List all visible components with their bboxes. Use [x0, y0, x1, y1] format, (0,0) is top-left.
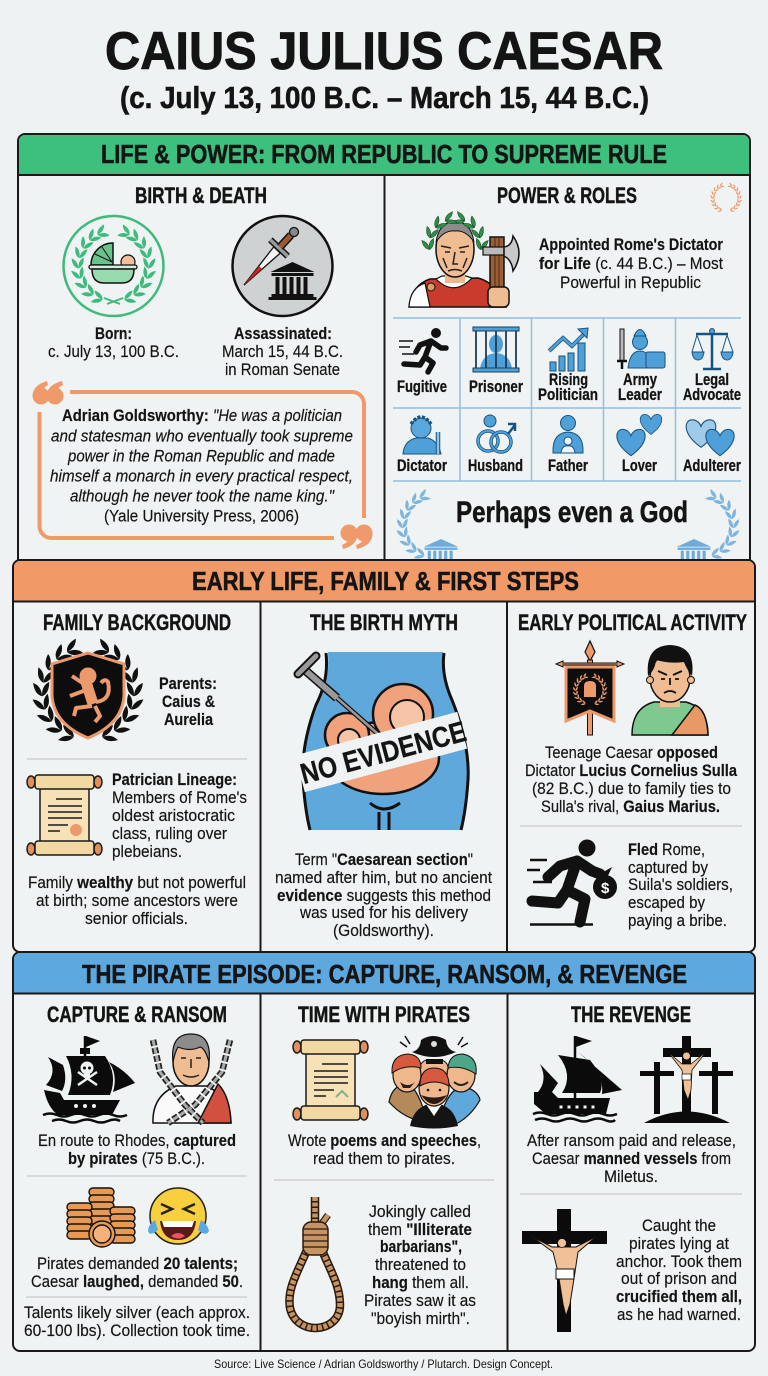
- heading: capture and ransom: CAPTURE & RANSOM: [47, 1002, 227, 1027]
- icon: crucifix: [522, 1209, 607, 1332]
- text: illiterate barbarians: threatened to: [375, 1255, 466, 1274]
- panel: early life: [13, 560, 755, 952]
- text: talents note: 60-100 lbs). Collection took time.: [24, 1321, 250, 1340]
- icon: poem scroll: [293, 1040, 368, 1120]
- text: illiterate barbarians: Jokingly called: [369, 1202, 471, 1221]
- source line: Source: Live Science / Adrian Goldsworthy / Plutarch. Design Concept.: [214, 1357, 553, 1371]
- quote text: (Yale University Press, 2006): [104, 506, 299, 526]
- panel: pirate episode: [13, 952, 755, 1351]
- role: prisoner: [469, 327, 523, 396]
- role: lover: [617, 414, 662, 475]
- role: lover: Lover: [622, 457, 657, 475]
- text: ransom demand: Caesar laughed, demanded 50.: [31, 1272, 243, 1291]
- text: family wealth: Family wealthy but not powerful: [28, 873, 246, 892]
- text: parents: Parents:: [159, 674, 217, 693]
- text: caesarean section: Term "Caesarean section": [295, 850, 473, 869]
- text: illiterate barbarians: them "Illiterate: [368, 1220, 472, 1239]
- icon: teenage Caesar: [632, 645, 708, 735]
- section header: early life: EARLY LIFE, FAMILY & FIRST STEPS: [192, 566, 579, 596]
- role: husband: [468, 415, 523, 475]
- text: parents: [159, 674, 217, 729]
- icon: three crosses: [640, 1036, 733, 1123]
- role: legal advocate: [683, 328, 741, 404]
- icon: laughing emoji: [148, 1188, 209, 1244]
- role: rising politician: Politician: [538, 386, 598, 404]
- role: rising politician: Rising: [549, 371, 588, 389]
- heading: family background: FAMILY BACKGROUND: [43, 610, 231, 635]
- role: adulterer: Adulterer: [683, 457, 741, 475]
- heading: the revenge: THE REVENGE: [571, 1002, 691, 1027]
- text: assassinated: Assassinated:: [234, 324, 332, 343]
- quote box: [32, 381, 373, 549]
- text: manned vessels: [527, 1131, 736, 1186]
- text: teenage Caesar opposed Sulla: Teenage Caesar opposed: [545, 743, 718, 762]
- role: fugitive: [397, 328, 447, 396]
- roles grid: [393, 318, 741, 481]
- text: talents note: [24, 1303, 250, 1340]
- text: dictator for life: Appointed Rome's Dictator: [539, 235, 723, 254]
- text: perhaps even a god: Perhaps even a God: [456, 496, 688, 529]
- text: crucified them all: crucified them all,: [616, 1287, 742, 1306]
- text: poems and speeches: [288, 1131, 481, 1168]
- text: crucified them all: out of prison and: [621, 1269, 737, 1288]
- text: caesarean section: named after him, but no ancient: [275, 868, 492, 887]
- text: captured by pirates: En route to Rhodes, captured: [38, 1131, 236, 1150]
- text: crucified them all: [616, 1216, 742, 1324]
- text: poems and speeches: Wrote poems and speeches,: [288, 1131, 481, 1150]
- icon: opening quote mark: [32, 381, 64, 404]
- panel: life and power: [18, 134, 750, 569]
- text: caesarean section: (Goldsworthy).: [333, 921, 434, 940]
- text: dictator for life: Powerful in Republic: [560, 273, 701, 292]
- text: talents note: Talents likely silver (each approx.: [24, 1303, 250, 1322]
- text: ransom demand: Pirates demanded 20 talents;: [37, 1254, 238, 1273]
- role: army leader: Army: [623, 371, 658, 389]
- text: patrician lineage: oldest aristocratic: [112, 806, 235, 825]
- text: fled Rome: paying a bribe.: [628, 911, 727, 930]
- text: illiterate barbarians: barbarians",: [380, 1237, 462, 1256]
- subtitle: dates: (c. July 13, 100 B.C. – March 15, 44 B.C.): [120, 80, 649, 115]
- icon: runner with money bag: [527, 840, 617, 924]
- role: father: [548, 416, 588, 475]
- icon: orange laurel: [710, 182, 742, 213]
- text: crucified them all: pirates lying at: [629, 1234, 729, 1253]
- role: father: Father: [548, 457, 588, 475]
- text: illiterate barbarians: Pirates saw it as: [364, 1291, 476, 1310]
- text: teenage Caesar opposed Sulla: Sulla's rival, Gaius Marius.: [541, 797, 720, 816]
- quote text: [50, 406, 353, 526]
- text: born: c. July 13, 100 B.C.: [48, 342, 179, 361]
- text: assassinated: in Roman Senate: [225, 360, 340, 379]
- quote text: power in the Roman Republic and made: [67, 446, 335, 466]
- icon: patrician scroll: [27, 775, 102, 855]
- text: dictator for life: [539, 235, 723, 292]
- text: patrician lineage: Members of Rome's: [112, 788, 247, 807]
- quote text: Adrian Goldsworthy: "He was a politician: [62, 406, 342, 425]
- text: ransom demand: [31, 1254, 243, 1291]
- role: army leader: [617, 329, 665, 404]
- text: caesarean section: was used for his delivery: [299, 903, 468, 922]
- text: family wealth: senior officials.: [85, 909, 188, 928]
- illustration: birth myth no evidence: [295, 652, 470, 830]
- role: army leader: Leader: [618, 386, 662, 404]
- icon: right laurel and temple: [675, 489, 740, 569]
- text: patrician lineage: [112, 770, 247, 861]
- icon: family crest: [33, 639, 143, 744]
- role: legal advocate: Legal: [695, 371, 729, 389]
- text: teenage Caesar opposed Sulla: [525, 743, 737, 816]
- heading: birth and death: BIRTH & DEATH: [135, 183, 267, 208]
- role: rising politician: [538, 328, 598, 404]
- text: assassinated: March 15, 44 B.C.: [222, 342, 343, 361]
- text: family wealth: [28, 873, 246, 928]
- role: prisoner: Prisoner: [469, 378, 523, 396]
- icon: chained Caesar: [153, 1034, 231, 1123]
- icon: left laurel and temple: [396, 489, 460, 569]
- role: dictator: Dictator: [397, 457, 447, 475]
- text: patrician lineage: class, ruling over: [112, 824, 227, 843]
- text: teenage Caesar opposed Sulla: Dictator Lucius Cornelius Sulla: [525, 761, 737, 780]
- icon: roman standard: [556, 641, 624, 735]
- icon: Caesar with fasces: [409, 212, 519, 307]
- quote text: himself a monarch in every practical respect,: [50, 466, 353, 486]
- icon: noose: [289, 1197, 340, 1328]
- heading: power and roles: POWER & ROLES: [497, 183, 637, 208]
- text: parents: Caius &: [162, 692, 215, 711]
- text: patrician lineage: Patrician Lineage:: [112, 770, 237, 789]
- text: fled Rome: escaped by: [628, 893, 705, 912]
- text: fled Rome: captured by: [628, 858, 708, 877]
- title: CAIUS JULIUS CAESAR: [105, 22, 663, 81]
- text: teenage Caesar opposed Sulla: (82 B.C.) due to family ties to: [532, 779, 731, 798]
- text: patrician lineage: plebeians.: [112, 842, 182, 861]
- text: illiterate barbarians: [364, 1202, 476, 1328]
- role: husband: Husband: [468, 457, 523, 475]
- quote text: and statesman who eventually took supreme: [51, 426, 353, 446]
- heading: time with pirates: TIME WITH PIRATES: [298, 1002, 470, 1027]
- text: crucified them all: as he had warned.: [617, 1305, 741, 1324]
- text: fled Rome: Suila's soldiers,: [628, 875, 733, 894]
- role: dictator: [397, 417, 447, 475]
- text: fled Rome: [628, 840, 733, 930]
- text: born: [48, 324, 179, 361]
- text: family wealth: at birth; some ancestors were: [36, 891, 238, 910]
- section header: life and power: LIFE & POWER: FROM REPUBLIC TO SUPREME RULE: [101, 139, 667, 169]
- text: captured by pirates: [38, 1131, 236, 1168]
- role: adulterer: [683, 420, 741, 475]
- text: captured by pirates: by pirates (75 B.C.).: [68, 1149, 205, 1168]
- text: crucified them all: Caught the: [642, 1216, 716, 1235]
- text: parents: Aurelia: [164, 710, 213, 729]
- text: poems and speeches: read them to pirates.: [313, 1149, 455, 1168]
- text: manned vessels: Caesar manned vessels from: [532, 1149, 731, 1168]
- text: manned vessels: After ransom paid and release,: [527, 1131, 736, 1150]
- banner: no evidence: NO EVIDENCE: [297, 716, 470, 791]
- text: crucified them all: anchor. Took them: [616, 1252, 742, 1271]
- icon: bassinet in laurel: [64, 216, 164, 316]
- heading: the birth myth: THE BIRTH MYTH: [310, 610, 458, 635]
- text: illiterate barbarians: "boyish mirth".: [371, 1309, 470, 1328]
- text: caesarean section: [275, 850, 492, 940]
- icon: dagger over senate: [232, 216, 332, 316]
- text: fled Rome: Fled Rome,: [628, 840, 705, 859]
- role: fugitive: Fugitive: [397, 378, 447, 396]
- text: illiterate barbarians: hang them all.: [372, 1273, 469, 1292]
- text: born: Born:: [95, 324, 132, 343]
- icon: pirate crew: [389, 1036, 480, 1128]
- icon: Caesar's ship: [533, 1036, 622, 1122]
- role: legal advocate: Advocate: [683, 386, 741, 404]
- icon: runner with money bag: $: [601, 880, 610, 897]
- quote text: although he never took the name king.": [70, 486, 335, 506]
- icon: coin stacks: [67, 1188, 135, 1247]
- text: assassinated: [222, 324, 343, 379]
- text: dictator for life: for Life (c. 44 B.C.) – Most: [539, 254, 723, 273]
- icon: pirate ship: [43, 1036, 135, 1122]
- text: manned vessels: Miletus.: [604, 1167, 658, 1186]
- text: caesarean section: evidence suggests this method: [277, 886, 491, 905]
- icon: closing quote mark: [340, 524, 373, 549]
